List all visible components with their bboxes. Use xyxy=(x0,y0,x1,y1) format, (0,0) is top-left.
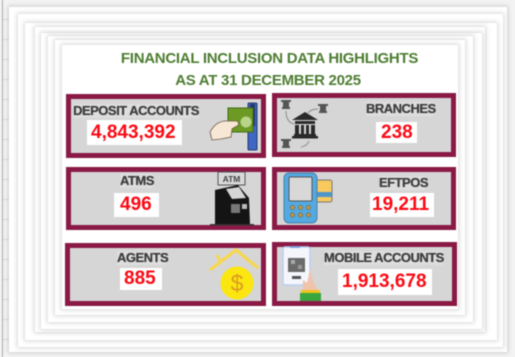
agents value: 885 xyxy=(124,268,156,289)
panel: atms xyxy=(66,167,266,230)
deposit accounts value: 4,843,392 xyxy=(91,122,176,143)
icon: payment terminal xyxy=(282,172,333,224)
panel: branches xyxy=(272,93,456,157)
mobile accounts value: 1,913,678 xyxy=(342,271,427,292)
panel: agents xyxy=(65,243,266,306)
branches label: BRANCHES xyxy=(366,101,436,116)
atms label: ATMS xyxy=(120,173,154,188)
panel: deposit accounts xyxy=(66,94,266,158)
mobile accounts label: MOBILE ACCOUNTS xyxy=(324,250,444,265)
spreadsheet gridline strip xyxy=(2,0,9,357)
eftpos label: EFTPOS xyxy=(379,175,428,190)
atms value xyxy=(114,193,159,217)
icon: bank branches xyxy=(280,99,329,149)
atms value: 496 xyxy=(120,194,152,215)
eftpos value: 19,211 xyxy=(372,194,429,215)
deposit accounts label: DEPOSIT ACCOUNTS xyxy=(73,103,199,118)
icon: house and dollar coin: $ xyxy=(231,270,244,296)
title: FINANCIAL INCLUSION DATA HIGHLIGHTS xyxy=(121,50,418,67)
icon: phone with qr code xyxy=(282,245,322,302)
icon: atm machine: ATM xyxy=(223,174,240,184)
panel: eftpos xyxy=(272,167,456,230)
panel: mobile accounts xyxy=(272,242,457,306)
branches value: 238 xyxy=(381,122,413,143)
subtitle: AS AT 31 DECEMBER 2025 xyxy=(175,72,361,89)
icon: house and dollar coin xyxy=(208,248,260,300)
agents label: AGENTS xyxy=(117,250,168,265)
icon: cash deposit xyxy=(209,102,258,152)
icon: atm machine xyxy=(209,171,255,226)
